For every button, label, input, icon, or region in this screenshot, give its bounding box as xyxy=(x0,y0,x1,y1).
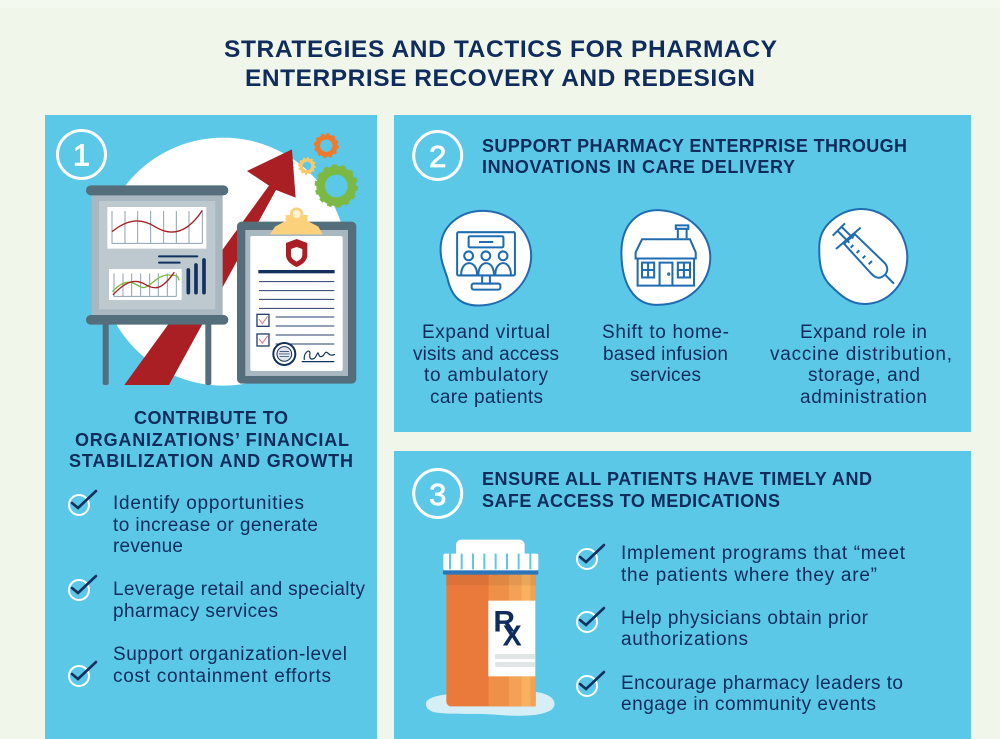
heading: innovations: INNOVATIONS IN CARE DELIVERY xyxy=(482,157,795,177)
check icon xyxy=(69,662,96,686)
heading: financial stabilization: CONTRIBUTE TO xyxy=(134,408,288,428)
text: vaccine role: storage, and xyxy=(808,365,920,386)
list: financial tactics xyxy=(69,491,366,687)
text: expand virtual visits xyxy=(413,322,559,408)
heading: innovations: SUPPORT PHARMACY ENTERPRISE THROUGH xyxy=(482,136,907,156)
heading: financial stabilization: STABILIZATION AND GROWTH xyxy=(69,451,353,471)
list item text xyxy=(621,543,906,586)
icon: syringe xyxy=(819,209,907,304)
text: expand virtual visits: care patients xyxy=(430,387,543,408)
number badge 2: 2 xyxy=(429,139,446,174)
text: home-based infusion: services xyxy=(630,365,701,386)
icon: prescription bottle: X xyxy=(503,621,522,653)
icon: house xyxy=(621,210,710,305)
text: home-based infusion xyxy=(602,322,729,386)
list item text: revenue xyxy=(113,536,183,557)
text: home-based infusion: based infusion xyxy=(603,344,728,365)
text: expand virtual visits: visits and access xyxy=(413,344,559,365)
heading: financial stabilization xyxy=(69,408,353,471)
number badge 3: 3 xyxy=(429,477,446,512)
list item text: Support organization-level xyxy=(113,644,347,665)
number badge 1: 1 xyxy=(73,138,90,172)
icon: prescription bottle: R xyxy=(493,606,515,639)
heading: access: ENSURE ALL PATIENTS HAVE TIMELY AND xyxy=(482,469,872,489)
panel: innovations in care delivery xyxy=(394,115,971,432)
icon: virtual visit monitor xyxy=(441,211,531,306)
list item text: authorizations xyxy=(621,629,748,650)
check icon xyxy=(577,545,604,569)
list item text xyxy=(621,608,869,650)
title xyxy=(224,36,777,92)
heading: access: SAFE ACCESS TO MEDICATIONS xyxy=(482,491,780,511)
number badge 1 xyxy=(58,130,106,178)
text: expand virtual visits: to ambulatory xyxy=(424,365,548,386)
number badge 2 xyxy=(414,132,462,180)
text: expand virtual visits: Expand virtual xyxy=(422,322,550,343)
icon: growth arrow xyxy=(124,149,296,385)
list item text: engage in community events xyxy=(621,694,876,715)
list item text: Leverage retail and specialty xyxy=(113,579,366,600)
check icon xyxy=(69,576,96,600)
text: vaccine role: administration xyxy=(800,387,927,408)
text: vaccine role: Expand role in xyxy=(800,322,927,343)
list item text: Identify opportunities xyxy=(113,493,304,514)
heading: innovations xyxy=(482,136,907,177)
illustration: charts, growth arrow, clipboard xyxy=(86,134,356,386)
check icon xyxy=(69,491,96,515)
list item text: to increase or generate xyxy=(113,515,318,536)
presentation board xyxy=(86,185,228,385)
heading: access xyxy=(482,469,872,511)
heading: financial stabilization: ORGANIZATIONS’ FINANCIAL xyxy=(75,430,349,450)
list item text: Help physicians obtain prior xyxy=(621,608,869,629)
icon: prescription bottle xyxy=(426,540,555,716)
icon: gears xyxy=(299,134,356,206)
text: vaccine role: vaccine distribution, xyxy=(770,344,952,365)
list item text xyxy=(113,493,318,557)
list item text xyxy=(113,579,366,622)
list item text: Implement programs that “meet xyxy=(621,543,906,564)
number badge 3 xyxy=(414,470,462,518)
list: access tactics xyxy=(577,543,906,715)
list item text: cost containment efforts xyxy=(113,666,331,687)
list item text: the patients where they are” xyxy=(621,565,877,586)
title: ENTERPRISE RECOVERY AND REDESIGN xyxy=(245,65,755,92)
list item text xyxy=(621,673,903,715)
panel: financial stabilization xyxy=(45,115,377,739)
check icon xyxy=(577,608,604,632)
title: STRATEGIES AND TACTICS FOR PHARMACY xyxy=(224,36,777,63)
panel: timely and safe access xyxy=(394,451,971,739)
list item text: pharmacy services xyxy=(113,601,278,622)
check icon xyxy=(577,672,604,696)
text: home-based infusion: Shift to home- xyxy=(602,322,729,343)
list item text: Encourage pharmacy leaders to xyxy=(621,673,903,694)
list item text xyxy=(113,644,347,687)
icons row xyxy=(441,209,907,306)
clipboard xyxy=(237,207,356,384)
text: vaccine role xyxy=(770,322,952,408)
